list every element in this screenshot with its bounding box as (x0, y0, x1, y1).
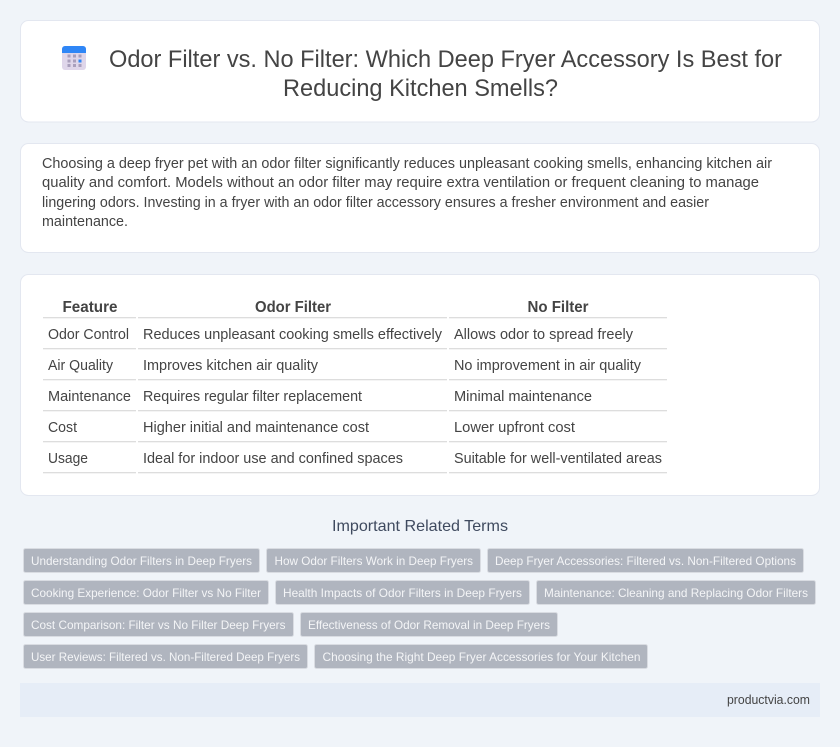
row: air quality: No improvement in air quality (454, 358, 642, 374)
row: air quality: Improves kitchen air quality (143, 358, 319, 374)
tag (276, 580, 530, 604)
row: maintenance: Maintenance (48, 389, 131, 405)
tag: Health Impacts of Odor Filters in Deep Fryers (283, 586, 522, 600)
row: cost (48, 420, 575, 436)
title: Reducing Kitchen Smells? (283, 75, 558, 102)
tag: How Odor Filters Work in Deep Fryers (274, 554, 473, 568)
tag: Cost Comparison: Filter vs No Filter Deep Fryers (31, 618, 286, 632)
row: odor control: Reduces unpleasant cooking smells effectively (143, 327, 443, 343)
row: usage: Suitable for well-ventilated areas (454, 451, 662, 467)
panel: title header (20, 20, 820, 122)
row: cost: Higher initial and maintenance cost (143, 420, 369, 436)
tag: Maintenance: Cleaning and Replacing Odor Filters (544, 586, 808, 600)
row: odor control: Odor Control (48, 327, 129, 343)
tag: Effectiveness of Odor Removal in Deep Fryers (308, 618, 550, 632)
tag (488, 548, 804, 572)
tag (266, 548, 480, 572)
tag (24, 580, 268, 604)
text block: description: quality and comfort. Models without an odor filter may require extra ventilation or frequent cleaning to manage (42, 175, 759, 191)
text block: description: lingering odors. Investing in a fryer with an odor filter accessory ensures a fresher environment and easier (42, 195, 709, 211)
table header: Feature (62, 299, 118, 316)
row: maintenance (48, 389, 592, 405)
row: maintenance: Minimal maintenance (454, 389, 592, 405)
row: air quality (48, 358, 642, 374)
table header: Odor Filter (255, 299, 331, 316)
tag (24, 644, 308, 668)
row: cost: Cost (48, 420, 77, 436)
text block: description: maintenance. (42, 214, 128, 230)
row: usage: Ideal for indoor use and confined spaces (143, 451, 403, 467)
row: maintenance: Requires regular filter replacement (143, 389, 362, 405)
title: Odor Filter vs. No Filter: Which Deep Fryer Accessory Is Best for (109, 46, 782, 73)
text block: description (42, 156, 772, 230)
row: usage (48, 451, 662, 467)
tag (536, 580, 816, 604)
tag: Understanding Odor Filters in Deep Fryers (31, 554, 252, 568)
row: odor control: Allows odor to spread freely (454, 327, 634, 343)
row: cost: Lower upfront cost (454, 420, 575, 436)
tag (24, 612, 294, 636)
tag (314, 644, 648, 668)
tag: Choosing the Right Deep Fryer Accessories for Your Kitchen (322, 650, 640, 664)
tag (300, 612, 558, 636)
table header: No Filter (528, 299, 588, 316)
related terms tags (24, 548, 816, 668)
text block: description: Choosing a deep fryer pet with an odor filter significantly reduces unpleasant cooking smells, enhancing kitchen air (42, 156, 772, 172)
tag: Deep Fryer Accessories: Filtered vs. Non-Filtered Options (495, 554, 796, 568)
footer text: productvia.com (727, 693, 810, 707)
title (109, 46, 782, 102)
row: air quality: Air Quality (48, 358, 114, 374)
footer bar (20, 683, 820, 717)
tag: Cooking Experience: Odor Filter vs No Filter (31, 586, 261, 600)
tag (24, 548, 260, 572)
panel: description (20, 144, 820, 252)
heading: related terms: Important Related Terms (332, 518, 508, 535)
row: odor control (48, 327, 634, 343)
table header (62, 299, 588, 316)
icon: calendar (62, 46, 86, 70)
panel: comparison table (20, 274, 820, 496)
tag: User Reviews: Filtered vs. Non-Filtered Deep Fryers (31, 650, 300, 664)
row: usage: Usage (48, 451, 88, 467)
